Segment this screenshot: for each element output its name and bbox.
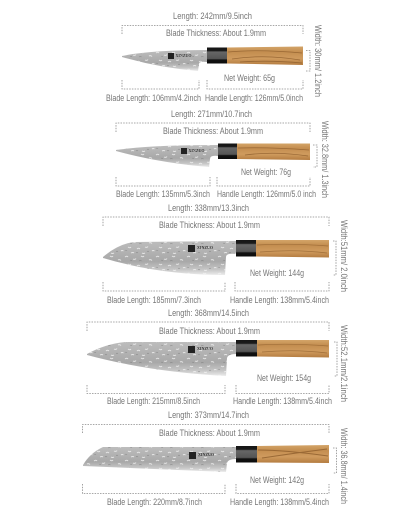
blade thickness label: Blade Thickness: About 1.9mm bbox=[159, 220, 260, 230]
blade length label: Blade Length: 106mm/4.2inch bbox=[106, 93, 201, 103]
handle length bracket bbox=[236, 385, 329, 394]
blade length label: Blade Length: 215mm/8.5inch bbox=[107, 396, 200, 406]
knife 1 image bbox=[122, 46, 303, 71]
panel: knife 4 specifications bbox=[87, 308, 349, 406]
net weight label: Net Weight: 154g bbox=[257, 373, 311, 383]
width bracket bbox=[334, 342, 337, 376]
blade length label: Blade Length: 135mm/5.3inch bbox=[116, 189, 210, 199]
handle length bracket bbox=[236, 484, 329, 494]
width label: Width: 30mm/ 1.2inch bbox=[313, 25, 323, 97]
panel: knife 2 specifications bbox=[116, 109, 330, 199]
net weight label: Net Weight: 65g bbox=[224, 73, 275, 83]
width label: Width:52.1mm/2.1inch bbox=[339, 325, 349, 402]
blade thickness label: Blade Thickness: About 1.9mm bbox=[159, 326, 260, 336]
knife 4 image: XINZUO bbox=[197, 346, 213, 351]
length label: Length: 338mm/13.3inch bbox=[168, 203, 249, 213]
length label: Length: 242mm/9.5inch bbox=[173, 11, 252, 21]
handle length bracket bbox=[217, 177, 310, 186]
knife 5 image: XINZUO bbox=[198, 452, 214, 457]
knife 5 image bbox=[83, 445, 329, 472]
blade length bracket bbox=[87, 385, 225, 394]
handle length label: Handle Length: 138mm/5.4inch bbox=[230, 295, 329, 305]
knife 3 image bbox=[103, 240, 329, 275]
overall length bracket bbox=[87, 322, 329, 331]
handle length label: Handle Length: 126mm/5.0inch bbox=[205, 93, 303, 103]
length label: Length: 368mm/14.5inch bbox=[168, 308, 249, 318]
width bracket bbox=[333, 448, 336, 473]
overall length bracket bbox=[122, 26, 303, 34]
knife 4 image bbox=[87, 340, 329, 376]
net weight label: Net Weight: 142g bbox=[250, 475, 304, 485]
panel: knife 5 specifications bbox=[82, 410, 349, 507]
blade thickness label: Blade Thickness: About 1.9mm bbox=[163, 126, 263, 136]
width bracket bbox=[333, 241, 336, 275]
blade length bracket bbox=[82, 484, 225, 494]
blade thickness label: Blade Thickness: About 1.9mm bbox=[159, 428, 260, 438]
blade length label: Blade Length: 220mm/8.7inch bbox=[107, 497, 202, 507]
knife 2 image bbox=[116, 144, 310, 167]
blade length bracket bbox=[116, 177, 210, 186]
width label: Width: 36.8mm/ 1.4inch bbox=[339, 428, 349, 504]
net weight label: Net Weight: 144g bbox=[250, 268, 304, 278]
width bracket bbox=[306, 50, 310, 71]
handle length label: Handle Length: 126mm/5.0 inch bbox=[217, 189, 316, 199]
handle length label: Handle Length: 138mm/5.4inch bbox=[230, 497, 329, 507]
blade length bracket bbox=[122, 80, 199, 89]
handle length bracket bbox=[207, 80, 303, 89]
panel: knife 3 specifications bbox=[103, 203, 349, 305]
panel: knife 1 specifications bbox=[106, 11, 323, 103]
blade thickness label: Blade Thickness: About 1.9mm bbox=[166, 28, 266, 38]
overall length bracket bbox=[103, 217, 329, 226]
blade length label: Blade Length: 185mm/7.3inch bbox=[107, 295, 201, 305]
handle length label: Handle Length: 138mm/5.4inch bbox=[233, 396, 332, 406]
overall length bracket bbox=[116, 123, 310, 132]
overall length bracket bbox=[82, 424, 329, 433]
knife 3 image: XINZUO bbox=[197, 245, 213, 250]
length label: Length: 373mm/14.7inch bbox=[168, 410, 249, 420]
width bracket bbox=[313, 145, 317, 167]
length label: Length: 271mm/10.7inch bbox=[171, 109, 252, 119]
handle length bracket bbox=[235, 282, 329, 291]
knife 1 image: XINZUO bbox=[176, 53, 192, 58]
width label: Width:51mm/ 2.0inch bbox=[339, 220, 349, 292]
width label: Width: 32.8mm/ 1.3inch bbox=[320, 121, 330, 198]
knife 2 image: XINZUO bbox=[188, 148, 205, 153]
blade length bracket bbox=[103, 282, 225, 291]
net weight label: Net Weight: 76g bbox=[241, 167, 291, 177]
